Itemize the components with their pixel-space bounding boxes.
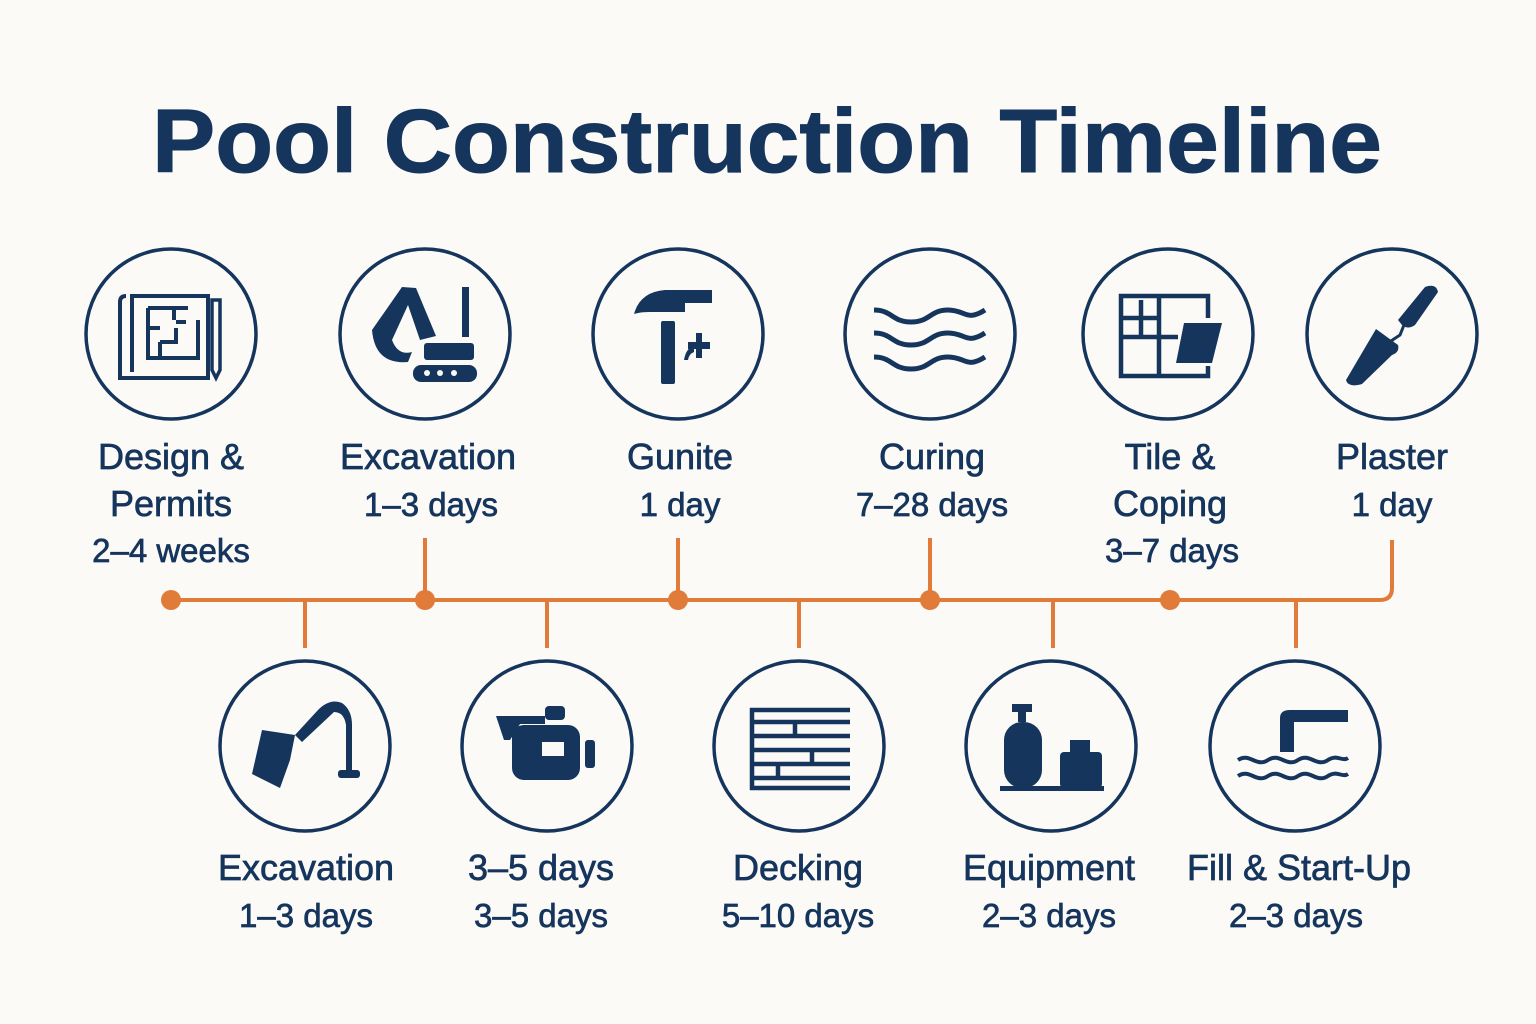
icon: deck boards	[750, 708, 850, 790]
step: 3-5 days: 3–5 days	[474, 897, 608, 934]
icon: hammer	[634, 290, 712, 384]
step: excavation top: 1–3 days	[364, 486, 498, 523]
icon: trowel	[1346, 286, 1438, 385]
step: equipment	[963, 661, 1136, 934]
step: excavation top: Excavation	[340, 436, 516, 477]
timeline	[161, 538, 1392, 648]
step: fill & start-up: 2–3 days	[1229, 897, 1363, 934]
step: fill & start-up	[1187, 661, 1411, 934]
step: excavation top	[340, 249, 516, 523]
step: decking: 5–10 days	[722, 897, 874, 934]
step: design & permits: Design &	[98, 436, 244, 477]
step: tile & coping: Coping	[1113, 483, 1227, 524]
step: plaster: Plaster	[1336, 436, 1448, 477]
step: design & permits: 2–4 weeks	[92, 532, 250, 569]
icon: blueprint	[120, 296, 220, 378]
title: Pool Construction Timeline	[152, 92, 1382, 192]
step: gunite	[593, 249, 763, 523]
step: curing	[845, 249, 1015, 523]
step: tile & coping: 3–7 days	[1105, 532, 1239, 569]
step: equipment: Equipment	[963, 847, 1135, 888]
icon: tiles	[1121, 296, 1208, 376]
step: 3-5 days: 3–5 days	[468, 847, 614, 888]
step: gunite: 1 day	[640, 486, 721, 523]
step: plaster	[1307, 249, 1477, 523]
step: curing: Curing	[879, 436, 985, 477]
step: excavation bottom: 1–3 days	[239, 897, 373, 934]
icon: filter & pump	[1000, 704, 1104, 791]
step: equipment: 2–3 days	[982, 897, 1116, 934]
step: curing: 7–28 days	[856, 486, 1008, 523]
step: fill & start-up: Fill & Start-Up	[1187, 847, 1411, 888]
step: 3-5 days	[462, 661, 632, 934]
step: tile & coping: Tile &	[1125, 436, 1215, 477]
step: design & permits: Permits	[110, 483, 232, 524]
step: decking	[714, 661, 884, 934]
icon: waves	[874, 310, 985, 369]
icon: machine	[496, 706, 595, 780]
step: design & permits	[86, 249, 256, 569]
step: excavation bottom: Excavation	[218, 847, 394, 888]
icon: excavator	[372, 287, 477, 382]
step: excavation bottom	[218, 661, 394, 934]
step: tile & coping	[1083, 249, 1253, 569]
step: plaster: 1 day	[1352, 486, 1433, 523]
icon: digging arm	[252, 702, 360, 788]
icon: faucet and water	[1280, 710, 1348, 752]
step: decking: Decking	[733, 847, 863, 888]
step: gunite: Gunite	[627, 436, 733, 477]
